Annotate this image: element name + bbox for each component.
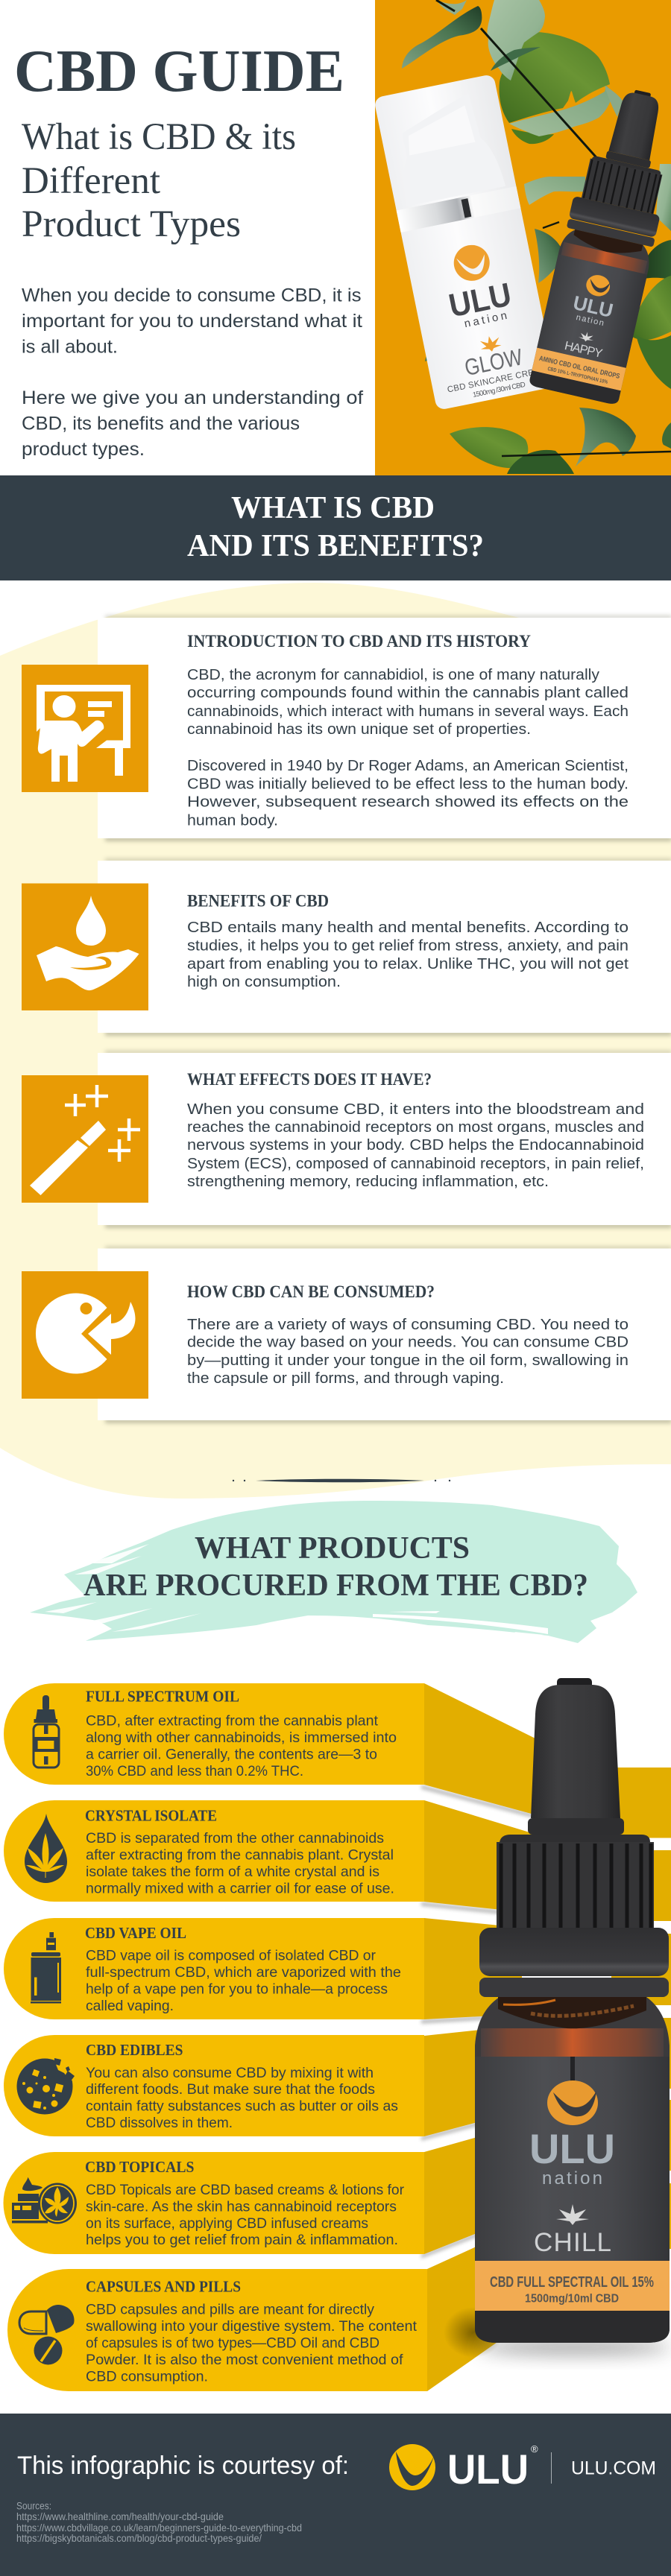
section banner: what is CBD bbox=[0, 475, 671, 580]
dark dropper bottle: Happy: HAPPY bbox=[563, 339, 604, 361]
panel: introduction: cannabinoid has its own unique set of properties. bbox=[187, 721, 531, 738]
large bottle: Chill: ULU bbox=[529, 2125, 615, 2172]
ribbons to bottle bbox=[424, 1683, 671, 2391]
bottle logo bbox=[547, 2080, 598, 2125]
product: vape oil bbox=[4, 1918, 424, 2019]
product: crystal isolate bbox=[4, 1800, 424, 1902]
panel: effects: WHAT EFFECTS DOES IT HAVE? bbox=[187, 1070, 432, 1089]
dark dropper bottle: Happy: AMINO CBD OIL ORAL DROPS bbox=[538, 355, 620, 380]
panel: effects: System (ECS), composed of cannabinoid receptors, in pain relief, bbox=[187, 1156, 644, 1172]
product: vape oil: CBD vape oil is composed of isolated CBD or bbox=[86, 1948, 377, 1964]
product: full spectrum oil: CBD, after extracting from the cannabis plant bbox=[86, 1712, 379, 1729]
product: edibles: You can also consume CBD by mixing it with bbox=[86, 2065, 374, 2081]
dark dropper bottle: Happy: CBD 10% L-TRYPTOPHAN 10% bbox=[547, 367, 608, 385]
panel: introduction: CBD was initially believed to be effect less to the human body. bbox=[187, 776, 629, 793]
icon: oil drop over hand bbox=[22, 884, 148, 1010]
panel: introduction: occurring compounds found within the cannabis plant called bbox=[187, 685, 629, 701]
product: capsules and pills: of capsules is of two types—CBD Oil and CBD bbox=[86, 2335, 379, 2352]
panel: effects: strengthening memory, reducing inflammation, etc. bbox=[187, 1174, 549, 1190]
icon: magic wand bbox=[22, 1075, 148, 1203]
panel: benefits: apart from enabling you to relax. Unlike THC, you will not get bbox=[187, 956, 629, 972]
ULU logo: ULU bbox=[447, 2446, 529, 2493]
mint brush stroke bbox=[30, 1501, 637, 1643]
product: full spectrum oil: along with other cannabinoids, is immersed into bbox=[86, 1730, 397, 1746]
product: capsules and pills: Powder. It is also the most convenient method of bbox=[86, 2352, 403, 2368]
panel: effects: nervous systems in your body. CBD helps the Endocannabinoid bbox=[187, 1137, 644, 1153]
hero: orange product panel bbox=[374, 0, 671, 475]
panel: consumption: by—putting it under your tongue in the oil form, swallowing in bbox=[187, 1352, 629, 1369]
subtitle: Product Types bbox=[22, 203, 241, 245]
product: capsules and pills: CBD consumption. bbox=[86, 2368, 208, 2384]
intro text: CBD, its benefits and the various bbox=[22, 413, 300, 434]
heading: what products bbox=[84, 1531, 588, 1603]
heading: what products: ARE PROCURED FROM THE CBD? bbox=[84, 1569, 588, 1603]
product: capsules and pills: CBD capsules and pills are meant for directly bbox=[86, 2301, 374, 2317]
panel: introduction: cannabinoids, which interact with humans in several ways. Each bbox=[187, 703, 629, 720]
heading: what products: WHAT PRODUCTS bbox=[195, 1531, 470, 1566]
large bottle: Chill: nation bbox=[542, 2168, 602, 2189]
white cream bottle: nation bbox=[463, 309, 508, 330]
icon: drop with leaf bbox=[25, 1814, 67, 1883]
panel: consumption: There are a variety of ways of consuming CBD. You need to bbox=[187, 1317, 629, 1333]
product: topicals: CBD Topicals are CBD based creams & lotions for bbox=[86, 2182, 404, 2198]
product: crystal isolate: CRYSTAL ISOLATE bbox=[85, 1806, 217, 1824]
icon: presenter at board bbox=[22, 665, 148, 792]
panel: introduction: CBD, the acronym for cannabidiol, is one of many naturally bbox=[187, 667, 599, 683]
panel: introduction: INTRODUCTION TO CBD AND ITS HISTORY bbox=[187, 632, 531, 651]
panel: benefits bbox=[98, 858, 671, 1036]
white cream bottle: CBD SKINCARE CREAM bbox=[447, 366, 548, 395]
logo on cream bottle bbox=[450, 242, 493, 284]
sources: https://www.cbdvillage.co.uk/learn/beginners-guide-to-everything-cbd bbox=[16, 2522, 302, 2534]
product: crystal isolate: CBD is separated from the other cannabinoids bbox=[86, 1830, 384, 1846]
title: CBD GUIDE bbox=[14, 39, 344, 104]
panel: effects: When you consume CBD, it enters into the bloodstream and bbox=[187, 1101, 644, 1118]
panel: benefits: CBD entails many health and mental benefits. According to bbox=[187, 920, 629, 936]
sources: https://bigskybotanicals.com/blog/cbd-product-types-guide/ bbox=[16, 2532, 262, 2544]
sources: Sources: bbox=[16, 2499, 51, 2511]
product: edibles: CBD dissolves in them. bbox=[86, 2115, 233, 2131]
intro text: important for you to understand what it bbox=[22, 311, 362, 332]
product: capsules and pills bbox=[7, 2269, 427, 2391]
product: full spectrum oil: a carrier oil. Generally, the contents are—3 to bbox=[86, 1747, 377, 1763]
product: capsules and pills: CAPSULES AND PILLS bbox=[86, 2277, 241, 2295]
product: full spectrum oil bbox=[4, 1683, 424, 1785]
product: topicals: helps you to get relief from pain & inflammation. bbox=[86, 2232, 398, 2248]
product: topicals: CBD TOPICALS bbox=[85, 2158, 194, 2176]
intro text: product types. bbox=[22, 439, 145, 460]
product: crystal isolate: after extracting from the cannabis plant. Crystal bbox=[86, 1846, 394, 1863]
sources bbox=[16, 2499, 302, 2544]
product: topicals: skin-care. As the skin has cannabinoid receptors bbox=[86, 2198, 397, 2215]
large bottle: Chill: CHILL bbox=[534, 2228, 611, 2257]
ULU logo: ULU.COM bbox=[571, 2458, 656, 2478]
intro text: Here we give you an understanding of bbox=[22, 387, 363, 408]
subtitle: Different bbox=[22, 160, 160, 202]
eucalyptus leaves bbox=[402, 0, 671, 474]
white cream bottle bbox=[374, 74, 557, 411]
section banner: what is CBD: AND ITS BENEFITS? bbox=[187, 529, 484, 563]
white cream bottle: 1500mg /30ml CBD bbox=[472, 381, 526, 399]
ribbon side shadows bbox=[421, 1785, 537, 2259]
product: crystal isolate: normally mixed with a carrier oil for ease of use. bbox=[86, 1881, 394, 1897]
dark dropper bottle: Happy bbox=[529, 81, 671, 405]
product: full spectrum oil: FULL SPECTRUM OIL bbox=[86, 1687, 239, 1705]
intro text: is all about. bbox=[22, 337, 118, 358]
icon: mouth eating arrow bbox=[22, 1271, 148, 1399]
dark dropper bottle: Happy: nation bbox=[575, 313, 605, 328]
icon: dropper bottle bbox=[33, 1695, 60, 1768]
panel: benefits: studies, it helps you to get relief from stress, anxiety, and pain bbox=[187, 937, 629, 954]
white cream bottle: GLOW bbox=[462, 344, 525, 381]
product: capsules and pills: swallowing into your digestive system. The content bbox=[86, 2318, 418, 2335]
ULU logo bbox=[389, 2443, 656, 2493]
product: vape oil: help of a vape pen for you to inhale—a process bbox=[86, 1981, 388, 1997]
subtitle bbox=[22, 116, 296, 245]
product: crystal isolate: isolate takes the form of a white crystal and is bbox=[86, 1864, 379, 1880]
panel: consumption: the capsule or pill forms, and through vaping. bbox=[187, 1370, 504, 1387]
icon: capsules bbox=[19, 2305, 75, 2365]
panel: effects: reaches the cannabinoid receptors on most organs, muscles and bbox=[187, 1119, 644, 1136]
divider bbox=[233, 1479, 450, 1482]
product: vape oil: called vaping. bbox=[86, 1998, 174, 2014]
product: edibles: contain fatty substances such as butter or oils as bbox=[86, 2098, 398, 2115]
subtitle: What is CBD & its bbox=[22, 116, 296, 158]
panel: effects bbox=[98, 1051, 671, 1228]
section banner: what is CBD: WHAT IS CBD bbox=[231, 491, 435, 525]
white cream bottle: ULU bbox=[446, 276, 514, 324]
icon: cream jar bbox=[12, 2177, 77, 2224]
product: vape oil: full-spectrum CBD, which are vaporized with the bbox=[86, 1964, 401, 1981]
icon: cookie bbox=[16, 2055, 78, 2115]
product: edibles: different foods. But make sure that the foods bbox=[86, 2081, 375, 2098]
panel: benefits: high on consumption. bbox=[187, 974, 341, 990]
sources: https://www.healthline.com/health/your-cbd-guide bbox=[16, 2510, 224, 2522]
panel: introduction: human body. bbox=[187, 812, 278, 829]
cream background shape bbox=[0, 583, 671, 1499]
footer: This infographic is courtesy of: bbox=[17, 2452, 349, 2480]
intro text bbox=[22, 285, 363, 460]
large bottle: Chill: 1500mg/10ml CBD bbox=[525, 2292, 619, 2306]
product: topicals bbox=[3, 2152, 424, 2254]
panel: consumption: decide the way based on your needs. You can consume CBD bbox=[187, 1334, 629, 1350]
intro text: When you decide to consume CBD, it is bbox=[22, 285, 361, 306]
panel: benefits: BENEFITS OF CBD bbox=[187, 891, 329, 911]
ULU logo: ® bbox=[531, 2443, 538, 2455]
dark dropper bottle: Happy: ULU bbox=[571, 291, 615, 322]
product: topicals: on its surface, applying CBD infused creams bbox=[86, 2215, 368, 2232]
panel: introduction bbox=[98, 615, 671, 841]
icon: vape device bbox=[31, 1932, 61, 2003]
panel: introduction: However, subsequent research showed its effects on the bbox=[187, 794, 629, 811]
panel: consumption: HOW CBD CAN BE CONSUMED? bbox=[187, 1282, 435, 1301]
large bottle: Chill bbox=[475, 1678, 671, 2355]
product: edibles: CBD EDIBLES bbox=[86, 2041, 183, 2059]
footer bbox=[0, 2414, 671, 2576]
panel: consumption bbox=[98, 1246, 671, 1423]
product: vape oil: CBD VAPE OIL bbox=[85, 1924, 186, 1942]
product: edibles bbox=[4, 2035, 424, 2136]
product: full spectrum oil: 30% CBD and less than 0.2% THC. bbox=[86, 1763, 303, 1779]
panel: introduction: Discovered in 1940 by Dr Roger Adams, an American Scientist, bbox=[187, 758, 629, 774]
